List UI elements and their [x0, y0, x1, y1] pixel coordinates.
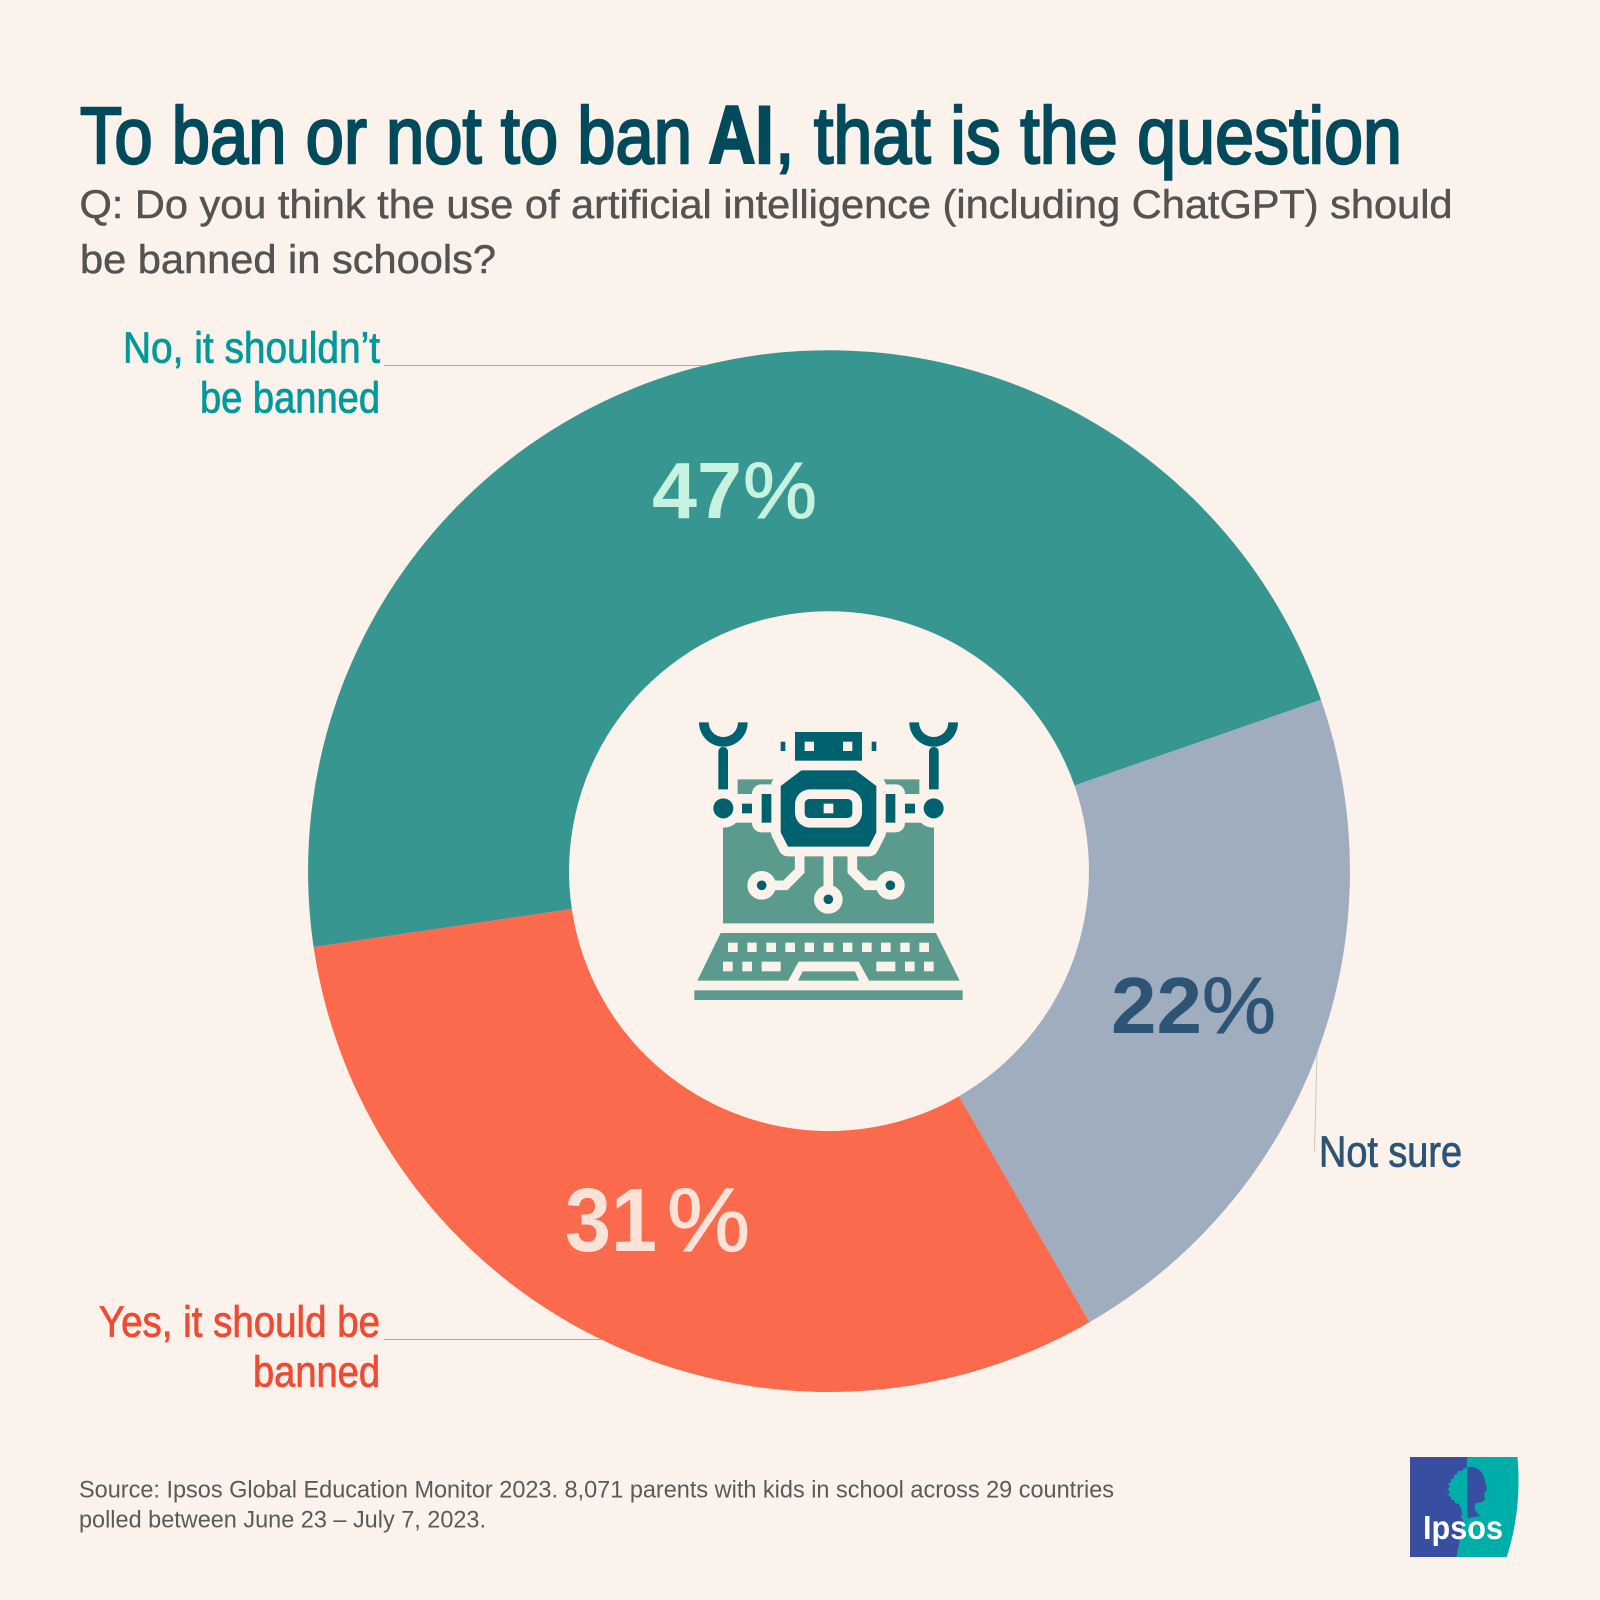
donut chart	[308, 350, 1350, 1392]
subtitle question	[80, 183, 1453, 282]
title: AI	[708, 90, 774, 181]
value: 31%: 31	[565, 1171, 657, 1271]
label: yes, it should be banned	[99, 1298, 380, 1396]
value: 22%	[1111, 961, 1276, 1050]
source note: polled between June 23 – July 7, 2023.	[79, 1506, 486, 1534]
title	[80, 90, 1402, 181]
segment: not sure 22%	[959, 700, 1350, 1322]
label: no, it shouldn't be banned: be banned	[200, 374, 380, 422]
label: no, it shouldn't be banned	[123, 324, 380, 422]
value: 47%	[652, 446, 817, 535]
label: yes, it should be banned: Yes, it should be	[99, 1298, 380, 1346]
label: not sure: Not sure	[1319, 1128, 1462, 1176]
value: 31%	[565, 1171, 750, 1271]
title: , that is the question	[775, 91, 1402, 180]
label: no, it shouldn't be banned: No, it shouldn’t	[123, 324, 380, 372]
logo: Ipsos: Ipsos	[1423, 1509, 1503, 1546]
segment: yes 31%	[314, 909, 1090, 1392]
subtitle question: be banned in schools?	[80, 238, 496, 282]
value: 47%: %	[743, 446, 817, 535]
source note: Source: Ipsos Global Education Monitor 2023. 8,071 parents with kids in school across 29 countries	[79, 1476, 1114, 1504]
value: 47%: 47	[652, 446, 742, 535]
value: 22%: 22	[1111, 961, 1202, 1050]
subtitle question: Q: Do you think the use of artificial intelligence (including ChatGPT) should	[80, 183, 1453, 227]
segment: no 47%	[308, 350, 1321, 947]
leader line: no	[384, 364, 705, 366]
value: 31%: %	[667, 1171, 750, 1271]
label: yes, it should be banned: banned	[253, 1348, 380, 1396]
value: 22%: %	[1202, 961, 1276, 1050]
leader line: yes	[384, 1338, 605, 1340]
icon: robot over laptop	[694, 722, 963, 1000]
title: To ban or not to ban	[80, 91, 692, 180]
leader line: not sure	[1314, 1053, 1317, 1152]
logo: Ipsos	[1410, 1457, 1519, 1557]
source note	[79, 1476, 1114, 1534]
